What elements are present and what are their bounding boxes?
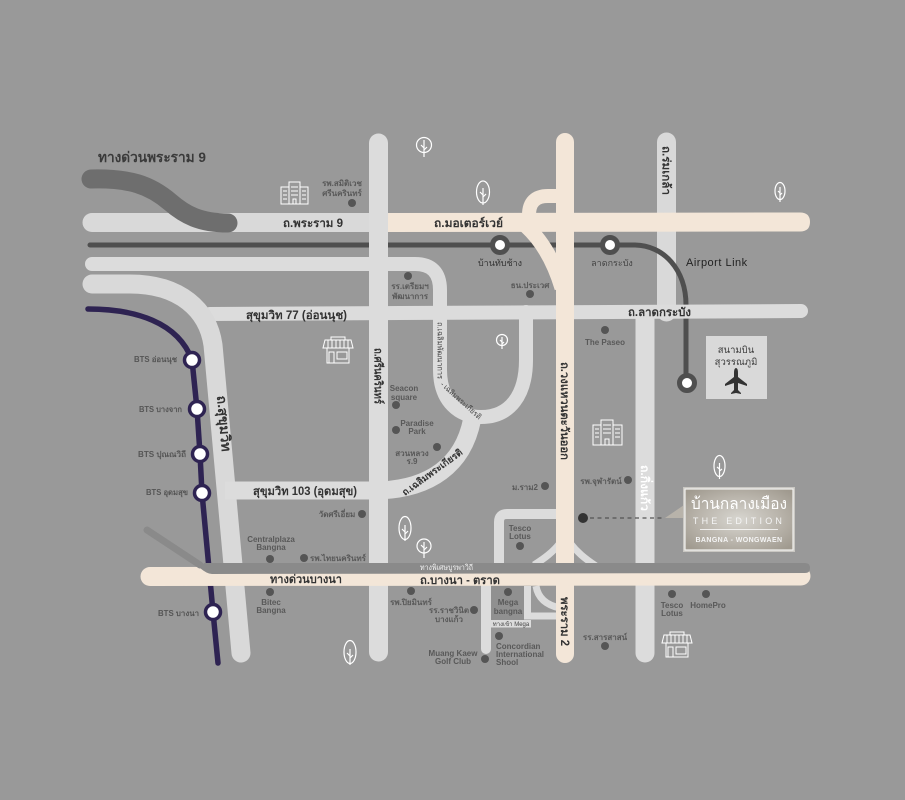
icon: hospital building top — [281, 182, 308, 204]
road: Sukhumvit 103 and Chaloem Phrakiat — [225, 420, 472, 490]
label: Lat Krabang: ถ.ลาดกระบัง — [628, 306, 691, 319]
place labels: ศรีนครินทร์ — [322, 188, 362, 198]
label: Ramkhamhaeng 2: ม.ราม2 — [512, 483, 539, 492]
label: Suan Luang: สวนหลวง — [395, 449, 429, 458]
road: Motorway loop ramp — [529, 196, 560, 228]
label: Concordian — [496, 642, 544, 667]
station: Bang Na — [206, 604, 220, 620]
label: Bangna expressway: ทางด่วนบางนา — [270, 573, 342, 586]
road: right ramp to Bangna — [570, 543, 596, 566]
label: Tesco Lotus north: Tesco — [509, 524, 531, 533]
road: Rama 9 expressway — [91, 179, 228, 223]
tree icon — [417, 539, 431, 558]
label: BTS Bang Na: BTS บางนา — [158, 609, 199, 618]
road: Mega soi — [481, 586, 491, 649]
label: Seacon Square: Seacon — [390, 384, 418, 393]
label: Samitivej: รพ.สมิติเวช — [322, 179, 362, 188]
place labels: Golf Club — [435, 657, 471, 666]
panel: airport — [706, 336, 767, 399]
label: BTS Bang Chak: BTS บางจาก — [139, 405, 182, 414]
label: Concordian: Shool — [496, 658, 518, 667]
road: Sukhumvit 77 and Lat Krabang — [210, 311, 801, 314]
tree icon — [775, 182, 785, 202]
label: Burapha Withi: ทางพิเศษบูรพาวิถี — [420, 563, 473, 572]
road: Bangna expressway — [150, 566, 801, 586]
label: The Paseo: The Paseo — [585, 338, 625, 347]
icon: shop left — [323, 337, 353, 363]
tree icon — [416, 138, 432, 157]
label: Romklao: ถ.ร่มเกล้า — [660, 146, 672, 195]
project title: บ้านกลางเมือง — [691, 495, 787, 513]
road: Burapha Withi deck — [200, 563, 810, 574]
callout: project name — [683, 487, 795, 552]
label: Muang Kaew: Muang Kaew — [429, 649, 478, 658]
road: Kingkaew — [636, 315, 654, 653]
place marker dots — [266, 199, 710, 663]
place labels: bangna — [494, 607, 523, 616]
BTS rail line — [88, 309, 218, 663]
icon: shop right — [662, 632, 692, 657]
road labels — [98, 146, 748, 646]
label: Rama 9 expressway: ทางด่วนพระราม 9 — [98, 149, 206, 165]
label: Chaloem Phattanakan: ถ.เฉลิมพัฒนาการ — [436, 322, 444, 379]
label: Kanchanaphisek: ถ.วงแหวนตะวันออก — [558, 362, 571, 460]
label: Chaloem Phrakiat main: ถ.เฉลิมพระเกียรติ — [400, 446, 465, 498]
place labels: Bangna — [256, 543, 286, 552]
label: Rama 9: ถ.พระราม 9 — [283, 218, 343, 230]
icon: airplane — [725, 368, 747, 394]
station: Udom Suk — [194, 486, 210, 500]
label: Ban Thap Chang: บ้านทับช้าง — [478, 258, 522, 268]
label: Thai Nakarin: รพ.ไทยนครินทร์ — [310, 553, 367, 563]
project location: BANGNA - WONGWAEN — [695, 537, 783, 544]
place labels: Bangna — [256, 606, 286, 615]
label: BTS Punnawithi: BTS ปุณณวิถี — [138, 449, 186, 460]
label: Sukhumvit 103: สุขุมวิท 103 (อุดมสุข) — [253, 485, 357, 499]
label: Srinagarindra: ถ.ศรีนครินทร์ — [372, 348, 386, 405]
place labels: Lotus — [509, 532, 531, 541]
label: Mega entrance — [491, 620, 531, 628]
road: Motorway — [388, 212, 810, 232]
panel: airport: สุวรรณภูมิ — [715, 357, 757, 368]
road: Mega ramp — [536, 586, 560, 608]
road: Mega access — [528, 586, 560, 616]
project pointer line — [578, 505, 684, 523]
place labels: Lotus — [661, 609, 683, 618]
road: Kanchanaphisek outer ring — [556, 142, 574, 654]
tree icon — [496, 334, 508, 349]
label: Sukhumvit 77: สุขุมวิท 77 (อ่อนนุช) — [246, 309, 347, 323]
label: Prawet district: ธน.ประเวศ — [511, 281, 550, 290]
BTS stations — [184, 352, 220, 620]
road: Rama 9 — [92, 213, 378, 232]
label: Paradise Park: Paradise — [400, 419, 434, 428]
road: Sukhumvit — [92, 284, 241, 653]
label: Lat Krabang station: ลาดกระบัง — [591, 258, 633, 268]
label: Mega Bangna: Mega — [498, 598, 519, 607]
place labels: บางแก้ว — [435, 614, 463, 624]
tree icon — [714, 456, 725, 479]
label: Mega entrance: ทางเข้า Mega — [493, 621, 530, 628]
label: HomePro: HomePro — [690, 601, 726, 610]
label: Kingkaew: ถ.กิ่งแก้ว — [638, 465, 654, 511]
label: Central Plaza: Centralplaza — [247, 535, 295, 544]
label: Piyamin: รพ.ปิยมินทร์ — [390, 597, 433, 607]
station: Bang Chak — [190, 402, 204, 416]
road: Burapha Withi approach — [147, 530, 200, 565]
label: Rama 2: พระราม 2 — [558, 597, 570, 646]
road: Motorway lower ramp — [526, 226, 562, 288]
road: Srinagarindra — [369, 143, 388, 652]
tree icon — [399, 516, 411, 541]
place labels: ร.9 — [407, 457, 418, 466]
label: Sarasas: รร.สารสาสน์ — [583, 632, 628, 642]
label: Tesco Lotus south: Tesco — [661, 601, 683, 610]
station: On Nut — [184, 352, 200, 368]
airport name: สนามบิน — [718, 345, 755, 356]
label: Concordian: International — [496, 650, 544, 659]
airport link rail line — [90, 245, 686, 383]
place labels — [247, 179, 726, 667]
place labels: Park — [408, 427, 426, 436]
label: Chularat: รพ.จุฬารัตน์ — [580, 476, 622, 487]
road: Romklao — [657, 142, 676, 312]
icon: hospital building middle — [593, 420, 622, 445]
label: Chaloem Phrakiat ring: - เฉลิมพระเกียรติ — [439, 380, 483, 421]
place labels: พัฒนาการ — [392, 292, 429, 301]
road: Kingkaew south end — [636, 644, 654, 662]
label: Ratchawinit: รร.ราชวินิต — [429, 606, 469, 615]
station labels — [134, 258, 633, 618]
station: Ban Thap Chang — [492, 238, 508, 252]
project subtitle: THE EDITION — [693, 516, 785, 526]
road network — [88, 142, 810, 663]
label: BTS On Nut: BTS อ่อนนุช — [134, 355, 178, 365]
label: Sukhumvit road: ถ.สุขุมวิท — [213, 395, 234, 452]
label: Triam school: รร.เตรียมฯ — [391, 281, 429, 291]
station: Punnawithi — [192, 446, 208, 462]
station: Suvarnabhumi — [680, 376, 694, 390]
label: Motorway: ถ.มอเตอร์เวย์ — [434, 216, 503, 230]
Mega bangna block — [491, 586, 524, 620]
label: Airport Link: Airport Link — [686, 257, 748, 269]
label: Bangna Trat: ถ.บางนา - ตราด — [420, 575, 500, 587]
road: Kanchanaphisek upper link — [92, 264, 526, 417]
tree icon — [476, 181, 490, 205]
label: Concordian: Concordian — [496, 642, 541, 651]
place labels: square — [391, 393, 418, 402]
airport link stations — [492, 238, 694, 390]
station: Lat Krabang — [602, 238, 618, 252]
tree icon — [344, 640, 356, 665]
label: Bitec: Bitec — [261, 598, 281, 607]
road: Tesco Lotus soi — [499, 514, 560, 565]
trees — [344, 138, 785, 665]
label: BTS Udom Suk: BTS อุดมสุข — [146, 488, 188, 498]
road: left ramp to Bangna — [534, 543, 560, 565]
label: Wat Si Iam: วัดศรีเอี่ยม — [319, 508, 355, 519]
